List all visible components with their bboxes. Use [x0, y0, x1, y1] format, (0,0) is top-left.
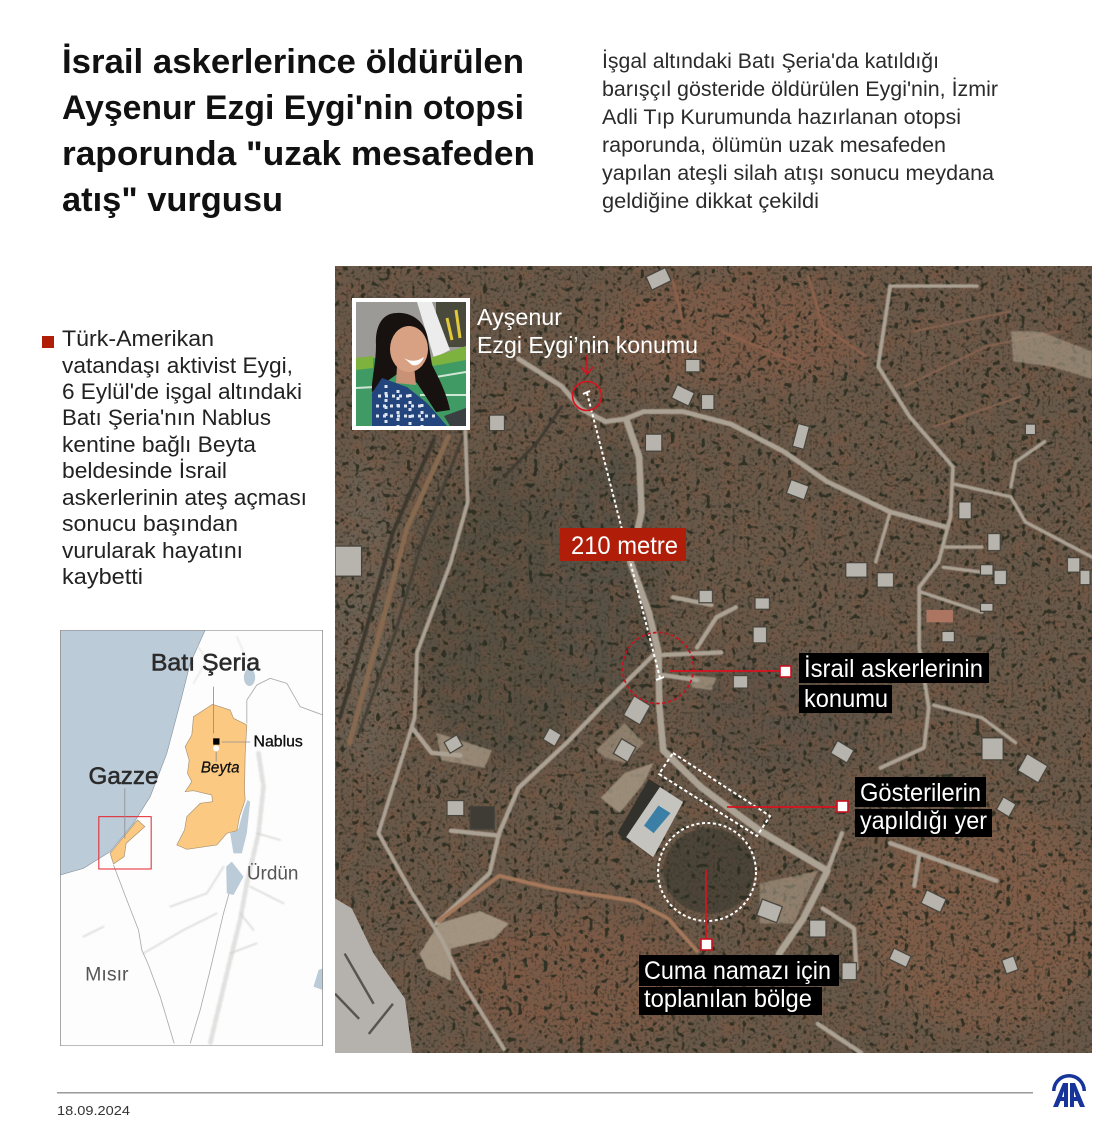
bottom-left quarry: [335, 898, 412, 1053]
frame: [60, 630, 323, 1046]
footer rule: [57, 1092, 1033, 1094]
callout: Friday prayer area: Cuma namazı için: [644, 957, 831, 985]
Gaza locator box: [99, 817, 151, 869]
callout: Friday prayer area: [639, 823, 839, 1015]
buildings: [335, 268, 1090, 980]
title: Ayşenur Ezgi Eygi'nin otopsi: [62, 89, 524, 127]
roads: [378, 286, 1092, 1053]
distance dotted line: [587, 393, 660, 678]
brown track: [439, 876, 697, 951]
summary text: yapılan ateşli silah atışı sonucu meydana: [602, 162, 994, 185]
marker: Eygi position: [572, 355, 664, 680]
satellite image: [186, 266, 1092, 1053]
summary text: [602, 50, 998, 213]
callout: soldiers position: [622, 632, 989, 713]
left text block: [42, 326, 307, 589]
date: 18.09.2024: [57, 1103, 130, 1118]
photo of Ayşenur Ezgi Eygi: [352, 298, 470, 430]
left text block: vatandaşı aktivist Eygi,: [62, 353, 293, 378]
red-roof plot: [926, 610, 953, 622]
bullet square: [42, 336, 54, 348]
callout: protest location: [659, 753, 992, 837]
summary text: geldiğine dikkat çekildi: [602, 190, 819, 213]
place labels: Batı Şeria: [151, 650, 261, 677]
left text block: Batı Şeria'nın Nablus: [62, 405, 271, 430]
sea: [60, 630, 205, 875]
dark tree clump: [663, 828, 755, 913]
neck: [396, 366, 416, 385]
pale ground areas: [419, 331, 1092, 981]
label: Eygi position: [477, 304, 698, 358]
summary text: Adli Tıp Kurumunda hazırlanan otopsi: [602, 106, 961, 129]
locator map: Gazze: [89, 763, 159, 790]
lakes: [226, 669, 323, 990]
callout: protest location: Gösterilerin: [860, 779, 981, 807]
left text block: 6 Eylül'de işgal altındaki: [62, 379, 302, 404]
label: Eygi position: Ezgi Eygi’nin konumu: [477, 332, 698, 358]
locator map: Beyta: [201, 759, 240, 776]
Beyta marker: [213, 745, 219, 751]
left text block: kaybetti: [62, 564, 143, 589]
callout: soldiers position: İsrail askerlerinin: [804, 654, 983, 683]
left text block: beldesinde İsrail: [62, 458, 227, 483]
locator map: Nablus: [254, 734, 303, 751]
West Bank: [177, 704, 247, 849]
hair: [372, 313, 450, 412]
title: İsrail askerlerince öldürülen: [62, 43, 524, 81]
summary text: raporunda, ölümün uzak mesafeden: [602, 134, 946, 157]
leader lines: [125, 687, 250, 838]
summary text: barışçıl gösteride öldürülen Eygi'nin, İzmir: [602, 78, 998, 101]
left text block: sonucu başından: [62, 511, 238, 536]
locator map: Ürdün: [247, 862, 299, 884]
left text block: vurularak hayatını: [62, 538, 243, 563]
callout: Friday prayer area: toplanılan bölge: [644, 985, 812, 1013]
Gaza Strip: [110, 820, 145, 864]
terraces: [340, 276, 1059, 743]
terrain relief: [84, 637, 284, 1043]
title: [62, 43, 535, 219]
Nablus marker: [213, 738, 220, 745]
villa with pool: [617, 779, 683, 857]
borders: [114, 678, 323, 1043]
title: raporunda "uzak mesafeden: [62, 135, 535, 173]
patterned blouse: [372, 378, 447, 426]
callout: protest location: yapıldığı yer: [860, 807, 987, 835]
left text block: kentine bağlı Beyta: [62, 432, 257, 457]
locator map: Mısır: [85, 965, 129, 986]
terrain colour patches: [330, 266, 1107, 1044]
title: atış" vurgusu: [62, 181, 283, 219]
left text block: Türk-Amerikan: [62, 326, 214, 351]
callout: soldiers position: konumu: [804, 685, 888, 713]
summary text: İşgal altındaki Batı Şeria'da katıldığı: [602, 50, 939, 73]
label: Eygi position: Ayşenur: [477, 304, 562, 330]
left text block: askerlerinin ateş açması: [62, 485, 307, 510]
locator map: [60, 630, 323, 1046]
distance label: 210 metre: [571, 532, 678, 560]
face: [390, 326, 428, 372]
icon: AA logo: [1052, 1074, 1086, 1107]
